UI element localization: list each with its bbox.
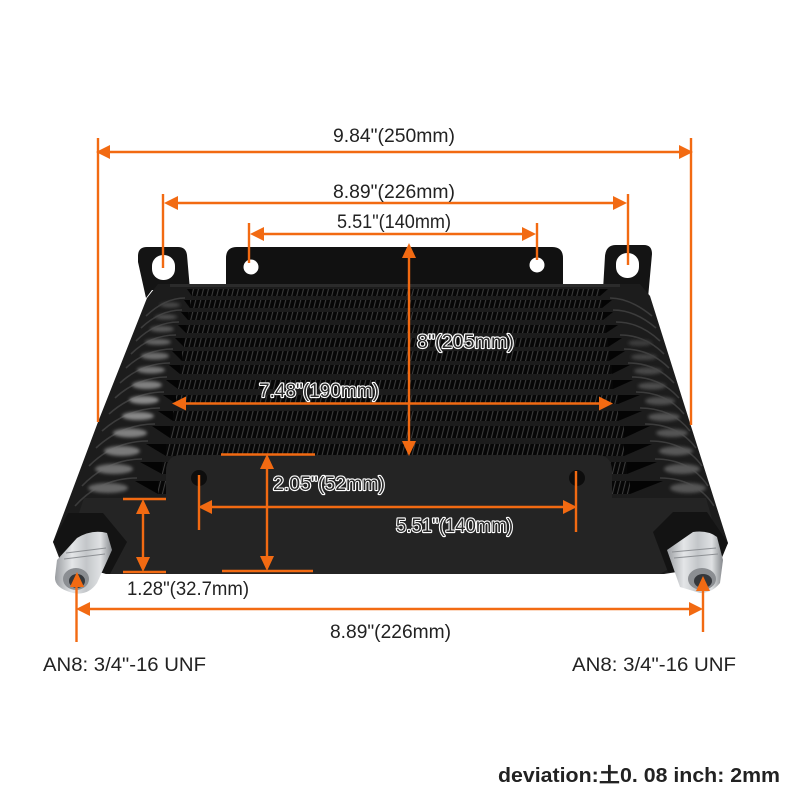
oil cooler product photo [53,245,728,594]
right hex nut [653,512,728,572]
dimension: core width 7.48 in [172,381,613,410]
right thread label: AN8: 3/4"-16 UNF [572,655,736,676]
dimension: core width 7.48 in: 7.48"(190mm) [259,381,379,402]
dimension: bracket hole spacing 5.51 in [249,212,537,263]
dimension: overall width 9.84 in: 9.84"(250mm) [333,126,455,147]
dimension: height 8 in [402,243,514,456]
cooling fin rows [135,284,663,494]
lower mounting plate [70,455,718,574]
left thread label: AN8: 3/4"-16 UNF [43,655,206,676]
center mounting bracket [226,247,563,290]
center left hole [244,260,258,274]
right AN8 fitting [667,532,723,593]
dimension: flange height 1.28 in: 1.28"(32.7mm) [127,579,249,600]
left plate slot [191,470,207,486]
dimension: plate slot spacing 5.51 in: 5.51"(140mm) [396,516,513,537]
dimension: plate height 2.05 in [221,454,385,571]
dimension: fitting spacing 8.89 in: 8.89"(226mm) [330,622,451,643]
dimension: fitting spacing 8.89 in [70,572,710,643]
cooler body [53,284,728,574]
dimension: plate height 2.05 in: 2.05"(52mm) [273,474,385,495]
fin highlights [88,302,706,493]
right plate slot [569,470,585,486]
dimension: flange height 1.28 in [123,499,249,600]
left AN8 fitting [55,532,112,594]
deviation note: deviation:土0. 08 inch: 2mm [498,764,780,787]
left hex nut [53,513,127,574]
center right hole [530,258,544,272]
left mounting hole [152,255,175,280]
dimension: plate slot spacing 5.51 in [198,471,577,537]
dimension: bracket hole spacing 5.51 in: 5.51"(140mm) [337,212,451,233]
dimension: tab spacing 8.89 in [163,182,628,268]
right mounting hole [616,253,639,278]
dimension: height 8 in: 8"(205mm) [417,332,514,353]
right mounting tab [603,245,652,298]
left mounting tab [138,247,190,298]
dimension: overall width 9.84 in [96,126,693,425]
fin edge curves [75,298,714,506]
dimension: tab spacing 8.89 in: 8.89"(226mm) [333,182,455,203]
